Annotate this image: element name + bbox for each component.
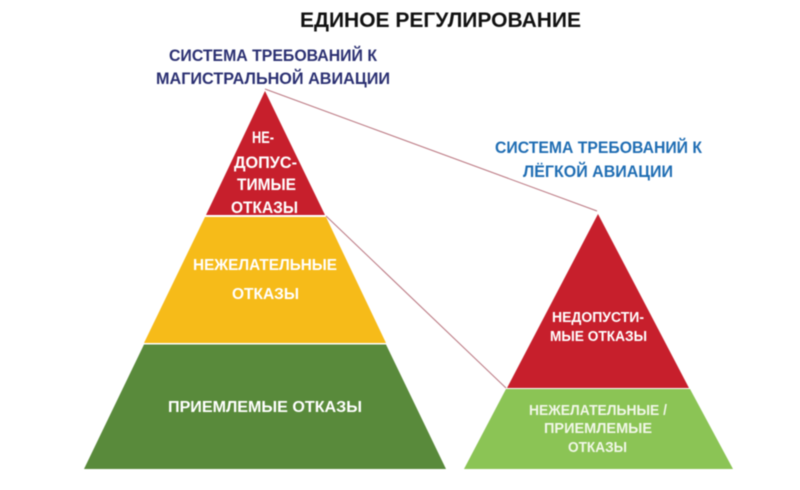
left tier: unacceptable failures: ДОПУС-	[234, 153, 297, 172]
right tier: unacceptable failures	[507, 214, 689, 388]
connector line: tier edge to tier edge	[326, 216, 506, 388]
left tier: acceptable failures	[84, 344, 446, 469]
left tier: unacceptable failures: ТИМЫЕ	[237, 175, 296, 194]
left tier: unacceptable failures: ОТКАЗЫ	[231, 198, 298, 217]
right tier: unacceptable failures: НЕДОПУСТИ-	[552, 310, 644, 326]
left tier: unacceptable failures: НЕ-	[252, 128, 274, 147]
right tier: unacceptable failures: МЫЕ ОТКАЗЫ	[550, 329, 647, 345]
heading: light aviation requirements	[495, 138, 703, 181]
right pyramid	[464, 214, 733, 469]
heading: light aviation requirements: ЛЁГКОЙ АВИАЦИИ	[523, 162, 673, 181]
left tier: undesirable failures: ОТКАЗЫ	[232, 286, 299, 303]
connector line: apex to apex	[265, 89, 597, 211]
title: ЕДИНОЕ РЕГУЛИРОВАНИЕ	[300, 9, 581, 32]
left tier: undesirable failures: НЕЖЕЛАТЕЛЬНЫЕ	[193, 257, 337, 274]
heading: mainline aviation requirements	[156, 46, 390, 88]
left tier: acceptable failures: ПРИЕМЛЕМЫЕ ОТКАЗЫ	[168, 399, 362, 416]
heading: mainline aviation requirements: СИСТЕМА ТРЕБОВАНИЙ К	[169, 46, 378, 65]
heading: light aviation requirements: СИСТЕМА ТРЕБОВАНИЙ К	[495, 138, 703, 157]
left pyramid	[84, 91, 446, 469]
left tier: undesirable failures	[144, 217, 386, 343]
right tier: undesirable and acceptable failures: НЕЖЕЛАТЕЛЬНЫЕ /	[529, 403, 667, 419]
left tier: unacceptable failures	[206, 91, 325, 217]
right tier: undesirable and acceptable failures: ПРИЕМЛЕМЫЕ	[544, 421, 652, 437]
right tier: undesirable and acceptable failures: ОТКАЗЫ	[568, 440, 627, 456]
right tier: undesirable and acceptable failures	[464, 389, 733, 469]
heading: mainline aviation requirements: МАГИСТРАЛЬНОЙ АВИАЦИИ	[156, 69, 390, 88]
